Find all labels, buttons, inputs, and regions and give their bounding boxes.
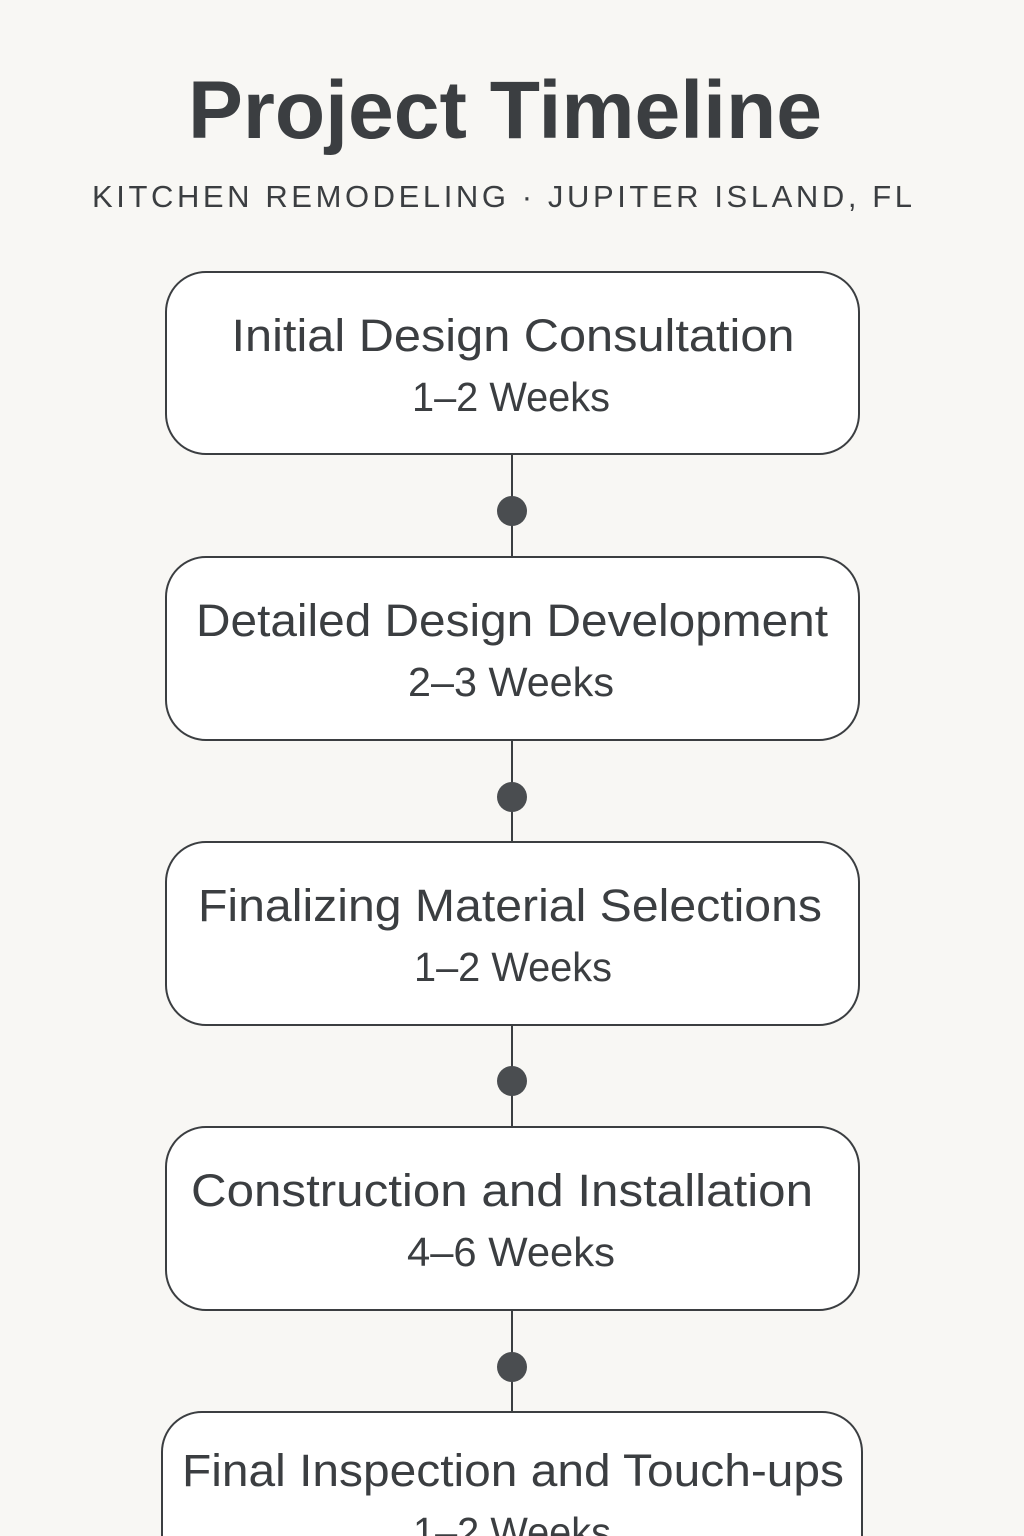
step 2 box: Detailed Design Development [196,595,829,646]
step 1 box [166,272,859,454]
connector 2 [497,740,527,842]
connector 3 [497,1025,527,1127]
step 5 box: Final Inspection and Touch-ups [182,1445,844,1496]
step 1 box: Initial Design Consultation [232,310,794,361]
subtitle: KITCHEN REMODELING · JUPITER ISLAND, FL [92,179,912,214]
step 3 box [166,842,859,1025]
step 3 box: Finalizing Material Selections [198,880,822,931]
connector 4 [497,1310,527,1412]
step 2 box: 2–3 Weeks [408,659,614,705]
title: Project Timeline [188,65,822,156]
step 2 box [166,557,859,740]
step 3 box: 1–2 Weeks [414,944,612,990]
step 1 box: 1–2 Weeks [412,374,610,420]
step 5 box [162,1412,862,1536]
step 4 box: Construction and Installation [191,1165,813,1216]
step 4 box [166,1127,859,1310]
step 4 box: 4–6 Weeks [407,1229,615,1275]
connector 1 [497,454,527,557]
